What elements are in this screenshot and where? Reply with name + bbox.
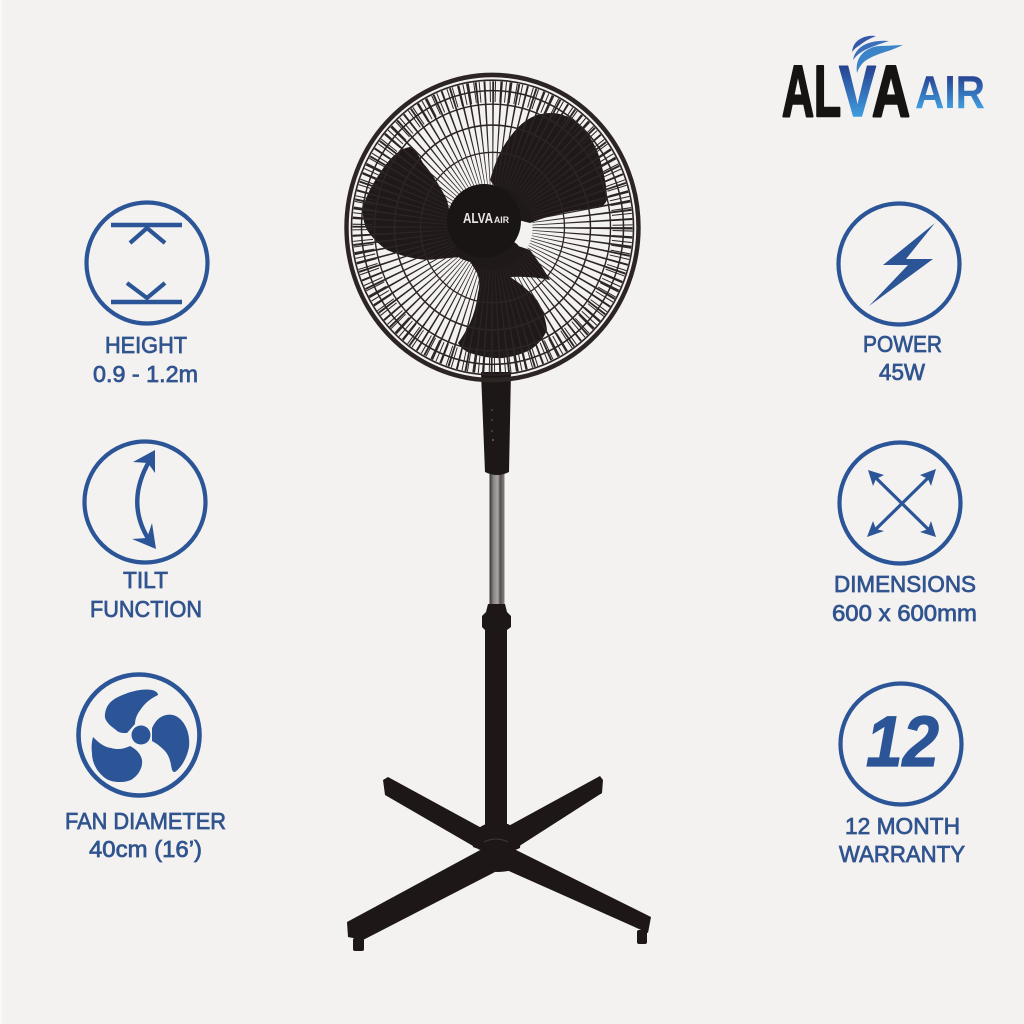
feature: dimensions — [832, 442, 977, 626]
label: dimensions: DIMENSIONS — [834, 571, 976, 597]
feature: warranty — [839, 684, 965, 867]
label: fan diameter: FAN DIAMETER — [65, 808, 226, 834]
fan hub — [447, 184, 521, 264]
logo wordmark ALVA: AL — [782, 52, 841, 132]
logo: Alva Air — [782, 36, 985, 132]
fan blades — [363, 113, 607, 358]
label: height: HEIGHT — [105, 332, 187, 358]
feature: height — [86, 202, 208, 387]
hub logo: AIR — [494, 215, 509, 225]
label: dimensions: 600 x 600mm — [832, 600, 977, 626]
hub logo: ALVA — [463, 210, 493, 227]
label: fan diameter — [65, 808, 226, 862]
icon: height — [86, 202, 208, 324]
label: warranty: 12 MONTH — [845, 813, 960, 839]
label: fan diameter: 40cm (16’) — [89, 836, 202, 862]
label: tilt: TILT — [123, 567, 168, 593]
icon: tilt arrows — [84, 442, 206, 562]
label: tilt — [90, 567, 202, 622]
icon: diagonal arrows — [840, 442, 960, 564]
label: dimensions — [832, 571, 977, 626]
icon: fan — [78, 674, 200, 796]
logo wordmark ALVA: V — [839, 52, 876, 132]
label: height: 0.9 - 1.2m — [93, 361, 198, 387]
label: height — [93, 332, 198, 387]
fan stand base — [347, 776, 651, 951]
feature: fan diameter — [65, 674, 226, 862]
pedestal fan product — [346, 75, 651, 951]
label: power: 45W — [879, 359, 925, 385]
feature: power — [838, 204, 960, 385]
label: power — [863, 331, 942, 385]
fan pole — [481, 372, 511, 825]
label: warranty — [839, 813, 965, 867]
icon: 12 badge: 12 — [866, 703, 939, 782]
icon: lightning bolt — [838, 204, 960, 324]
icon: 12 badge — [840, 684, 962, 804]
logo wordmark ALVA: A — [872, 52, 910, 132]
label: tilt: FUNCTION — [90, 596, 202, 622]
label: power: POWER — [863, 331, 942, 357]
feature: tilt — [84, 442, 206, 622]
logo wordmark AIR: AIR — [915, 66, 985, 118]
logo swoosh — [852, 36, 903, 73]
fan grille — [346, 75, 638, 380]
label: warranty: WARRANTY — [839, 841, 965, 867]
